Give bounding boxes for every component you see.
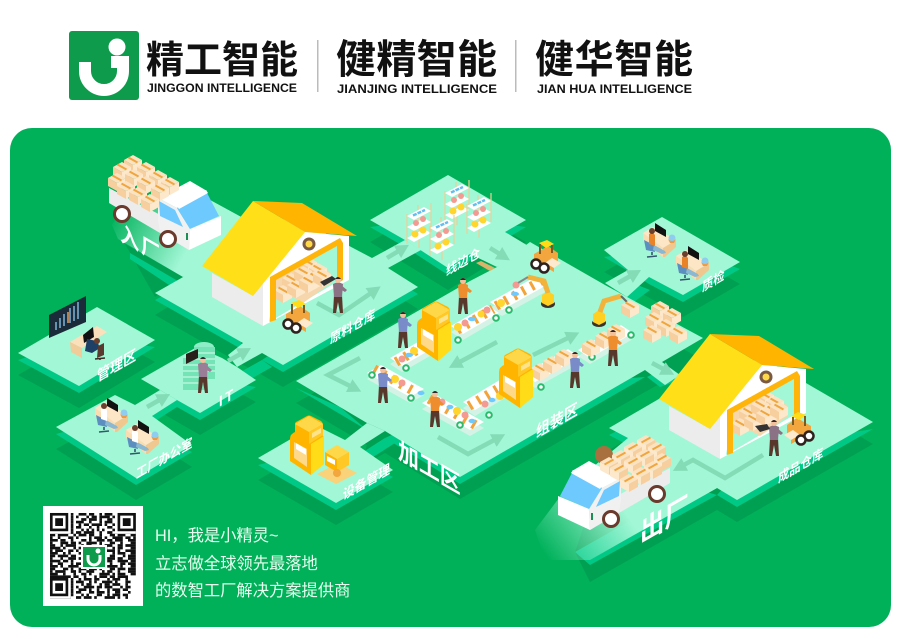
platform: 加工区 and 组装区 main floor bbox=[296, 242, 703, 477]
forklift: 原料仓库 bbox=[284, 300, 313, 332]
brand: 精工智能: JINGGON INTELLIGENCE bbox=[147, 81, 297, 95]
factory floor platforms bbox=[18, 175, 873, 582]
label: 出厂: 出厂 bbox=[640, 490, 689, 549]
tan conveyor piece bbox=[476, 261, 495, 271]
label: 组装区: 组装区 bbox=[536, 400, 578, 442]
dashboard screen: 管理区 bbox=[49, 296, 86, 338]
label: 入厂: 入厂 bbox=[120, 220, 162, 269]
platform: 成品仓库 bbox=[609, 358, 873, 520]
worker with scanner: 原料仓库 bbox=[320, 276, 347, 313]
robot arm 1 bbox=[513, 277, 555, 308]
platform: 管理区 bbox=[18, 307, 155, 386]
label: 管理区: 管理区 bbox=[97, 346, 136, 386]
QR center logo bbox=[81, 545, 107, 569]
brand: 健精智能: 健精智能 bbox=[336, 38, 497, 82]
label: 加工区: 加工区 bbox=[398, 437, 461, 500]
desk: 管理区 bbox=[70, 326, 107, 360]
label: 成品仓库: 成品仓库 bbox=[778, 445, 823, 486]
label: 工厂办公室: 工厂办公室 bbox=[136, 435, 193, 482]
intro text: HI，我是小精灵~ bbox=[155, 527, 278, 545]
platform: 工厂办公室 bbox=[56, 390, 192, 478]
desks: 工厂办公室 bbox=[95, 398, 159, 454]
forklift: 线边仓 bbox=[532, 240, 561, 272]
forklift: 成品仓库 bbox=[784, 412, 814, 444]
platform: truck outbound band bbox=[535, 438, 717, 560]
intro text: 的数智工厂解决方案提供商 bbox=[155, 582, 350, 600]
label: 线边仓: 线边仓 bbox=[446, 245, 480, 279]
platform: IT bbox=[141, 347, 256, 413]
logo icon bbox=[69, 31, 139, 100]
floor arrows bbox=[147, 248, 763, 478]
label: 原料仓库: 原料仓库 bbox=[330, 306, 375, 347]
labels bbox=[97, 220, 823, 549]
machine: small equipment on base bbox=[317, 445, 357, 484]
platform: 线边仓 bbox=[370, 175, 530, 268]
brand: 健华智能: JIAN HUA INTELLIGENCE bbox=[537, 82, 692, 96]
intro text bbox=[155, 527, 350, 600]
label: 设备管理: 设备管理 bbox=[343, 460, 390, 503]
machine: equipment tower bbox=[290, 416, 324, 475]
machine: conveyor tower 2 bbox=[499, 348, 533, 408]
QR code bbox=[43, 506, 143, 606]
IT server stack bbox=[183, 342, 215, 390]
brand: 健华智能: 健华智能 bbox=[535, 39, 693, 82]
label: IT: IT bbox=[219, 384, 236, 411]
brand: 精工智能: 精工智能 bbox=[146, 40, 298, 82]
worker with scanner: 成品仓库 bbox=[755, 420, 783, 456]
brand: 健精智能: JIANJING INTELLIGENCE bbox=[337, 82, 497, 96]
label: 质检: 质检 bbox=[702, 267, 725, 295]
box stack bbox=[643, 301, 687, 344]
platform: 质检 bbox=[604, 217, 740, 297]
logo group: header bbox=[69, 31, 693, 100]
truck: outbound bbox=[558, 435, 671, 530]
warehouse: 原料仓库 bbox=[202, 201, 357, 326]
conveyor lines bbox=[367, 277, 634, 436]
robot arm 2 bbox=[592, 296, 639, 327]
intro text: 立志做全球领先最落地 bbox=[155, 555, 318, 573]
platform: truck inbound band bbox=[112, 195, 260, 277]
racks: 线边仓 bbox=[407, 180, 491, 260]
desks: 质检 bbox=[643, 223, 709, 280]
warehouse: 成品仓库 bbox=[659, 334, 814, 459]
people bbox=[198, 278, 622, 427]
truck: inbound bbox=[108, 155, 221, 250]
platform: 设备管理 bbox=[258, 423, 393, 503]
platform: 原料仓库 bbox=[155, 200, 421, 367]
green background panel bbox=[10, 128, 891, 627]
machine: conveyor tower 1 bbox=[417, 302, 451, 361]
